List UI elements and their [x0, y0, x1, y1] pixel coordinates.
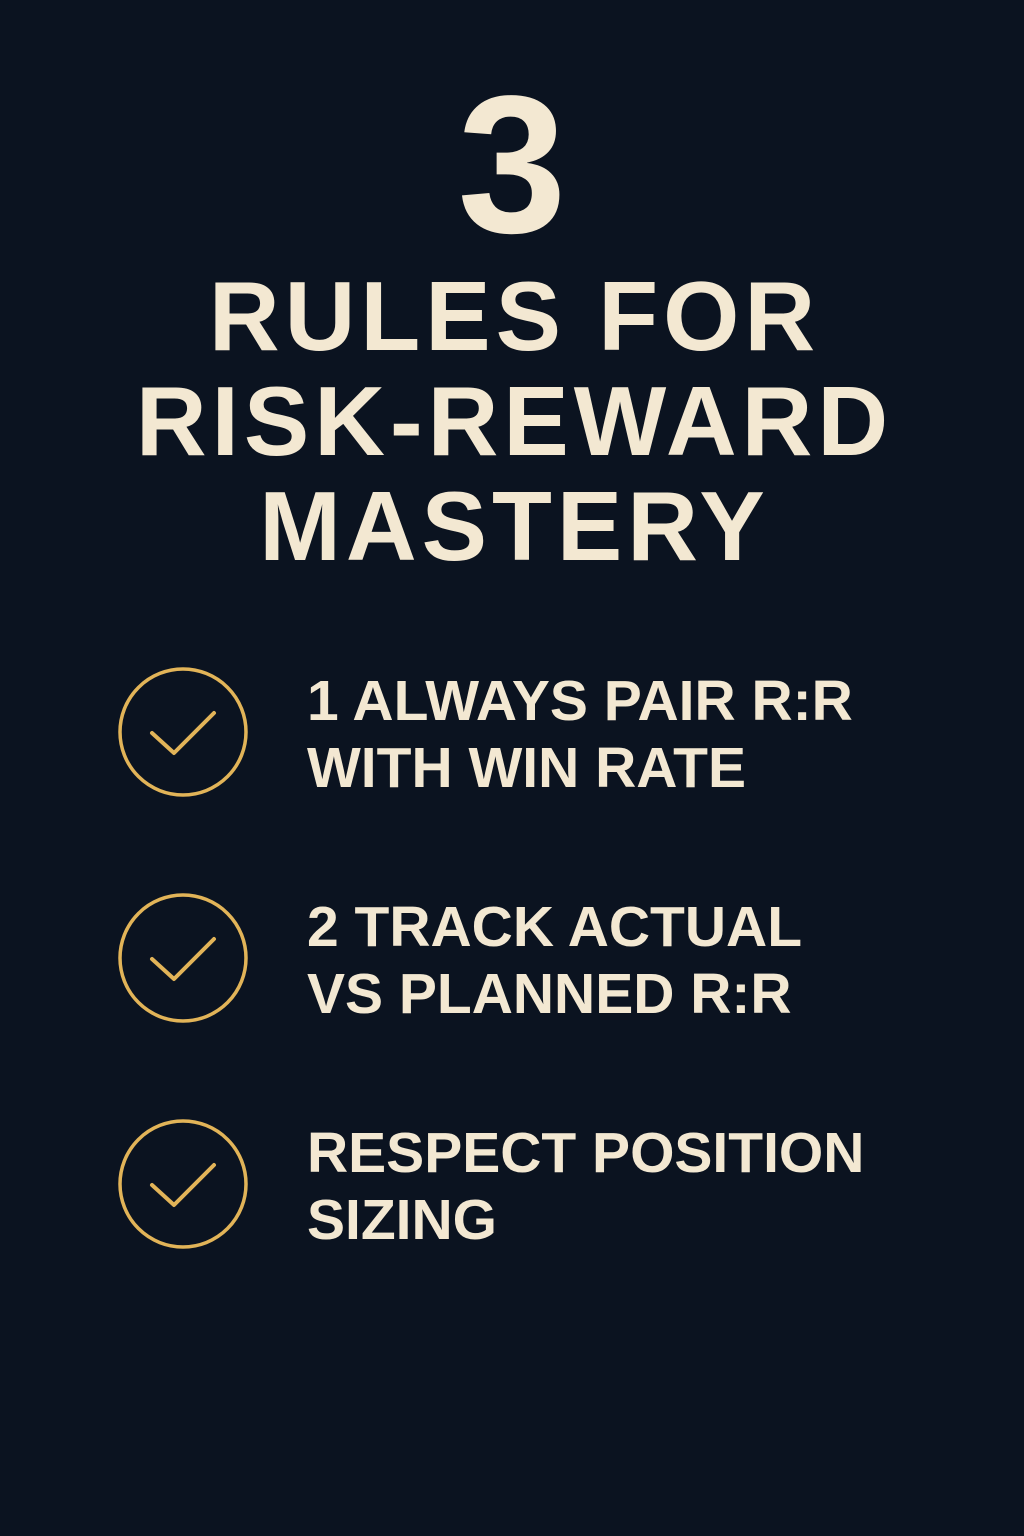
title number: 3 [457, 55, 566, 274]
rule 1 text [307, 669, 853, 800]
rule 3 text: SIZING [307, 1188, 497, 1252]
rule 1 text: 1 ALWAYS PAIR R:R [307, 669, 853, 733]
title: RISK-REWARD [136, 366, 893, 476]
rule 2 text: VS PLANNED R:R [307, 962, 792, 1026]
rule 3 text [307, 1121, 864, 1252]
rule 2 text [307, 895, 802, 1026]
title [136, 261, 893, 581]
icon: check circle 2 [118, 893, 248, 1023]
rule 2 text: 2 TRACK ACTUAL [307, 895, 802, 959]
rule 2 [118, 893, 802, 1026]
rule 3 [118, 1119, 864, 1252]
icon: check circle 3 [118, 1119, 248, 1249]
icon: check circle 1 [118, 667, 248, 797]
title: MASTERY [259, 471, 770, 581]
rule 1 [118, 667, 853, 800]
rule 1 text: WITH WIN RATE [307, 736, 746, 800]
rule 3 text: RESPECT POSITION [307, 1121, 864, 1185]
title: RULES FOR [209, 261, 820, 371]
